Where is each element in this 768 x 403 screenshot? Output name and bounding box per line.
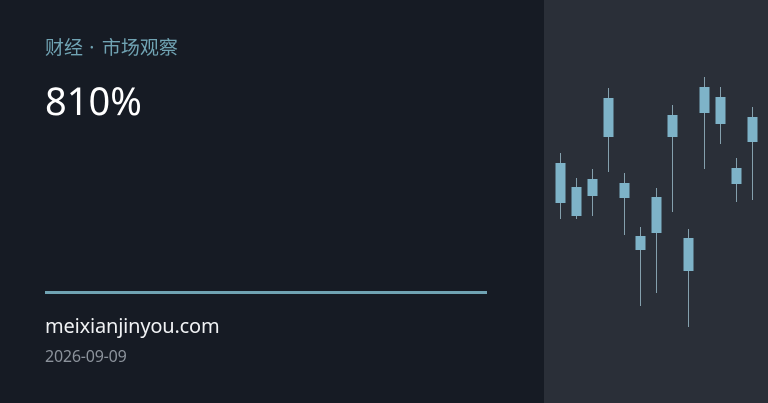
- accent rule: [45, 291, 487, 294]
- panel: left background: [0, 0, 544, 403]
- headline value: 810%: [45, 75, 142, 127]
- site name: meixianjinyou.com: [45, 312, 220, 339]
- panel: candlestick chart: [544, 0, 768, 403]
- eyebrow heading: 财经 · 市场观察: [45, 34, 178, 60]
- date: 2026-09-09: [45, 345, 127, 367]
